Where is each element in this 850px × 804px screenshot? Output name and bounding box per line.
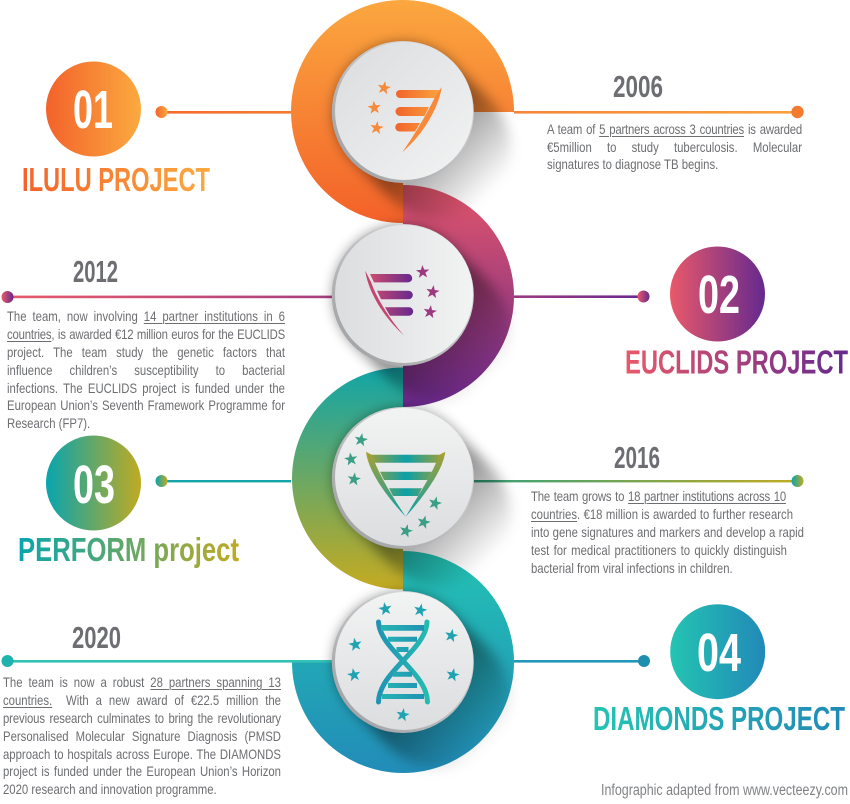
ring 4: turquoise to blue segment [292,551,514,773]
text block: 2012 description [7,308,285,431]
disk shadow 1 [403,112,441,150]
text block: 2012 description: European Union’s Seventh Framework Programme for [7,397,285,413]
connector line: EUCLIDS right [514,290,650,302]
number badge 01 [46,62,141,156]
disk 2 with icon [332,224,474,366]
text block: 2020 description: project is funded under the European Union’s Horizon [3,763,281,779]
text block: 2006 description: signatures to diagnose TB begins. [547,156,718,172]
title: ILULU PROJECT: ILULU PROJECT [22,161,210,198]
disk 1 with icon [332,41,474,183]
text block: 2016 description: test for medical practitioners to quickly distinguish [531,542,787,558]
connector line: 2016 right [474,475,804,487]
connector line: PERFORM left [156,475,291,487]
ring 3: teal to gold segment [292,368,403,590]
number badge 04: 04 [697,623,741,683]
disk 3 with icon [332,407,474,549]
text block: 2006 description: €5million to study tuberculosis. Molecular [547,139,802,155]
icon: DNA helix with seven stars [346,601,461,722]
text block: 2012 description: project. The team study the genetic factors that [7,344,285,360]
text block: 2006 description [547,121,802,172]
connector line: 2006 right [514,106,804,118]
connector line: 2012 left [2,291,332,303]
ring 2: pink to purple segment [403,185,514,407]
text block: 2016 description: bacterial from viral infections in children. [531,560,733,576]
text block: 2020 description: 2020 research and innovation programme. [3,781,217,797]
icon: EUCLIDS shield with three stars [365,265,440,336]
disk 4 with icon [332,591,474,733]
text block: 2016 description: countries. €18 million is awarded to further research [531,506,793,522]
text block: 2020 description: Personalised Molecular Signature Diagnosis (PMSD [3,728,281,744]
year 2012: 2012 [73,254,118,289]
text block: 2012 description: Research (FP7). [7,415,90,431]
icon: ILULU shield with three stars [367,80,442,152]
text block: 2016 description: into gene signatures and markers and develop a rapid [531,524,804,540]
disk shadow 3 [403,478,441,516]
ring 1: orange segment [291,0,514,223]
number badge 04 [670,604,765,699]
number badge 03: 03 [73,455,115,515]
disk shadow 2 [403,295,439,331]
number badge 01: 01 [73,80,113,140]
connector line: ILULU left [156,106,291,118]
text block: 2020 description [3,674,281,797]
connector line: 2020 left [2,655,332,667]
text block: 2020 description: approach to hospitals across Europe. The DIAMONDS [3,746,281,762]
year 2006: 2006 [613,69,663,104]
text block: 2012 description: The team, now involving 14 partner institutions in 6 [7,308,285,324]
text block: 2020 description: previous research culminates to bring the revolutionary [3,710,281,726]
text block: 2012 description: infections. The EUCLIDS project is funded under the [7,380,285,396]
year 2020: 2020 [72,620,121,655]
text block: 2016 description [531,488,804,576]
text block: 2020 description: The team is now a robust 28 partners spanning 13 [3,674,281,690]
text block: 2012 description: influence children’s susceptibility to bacterial [7,362,285,378]
connector line: DIAMONDS right [514,655,650,667]
number badge 02: 02 [698,265,740,325]
text block: 2006 description: A team of 5 partners across 3 countries is awarded [547,121,802,137]
text block: 2016 description: The team grows to 18 partner institutions across 10 [531,488,786,504]
text block: 2012 description: countries, is awarded €12 million euros for the EUCLIDS [7,326,285,342]
icon: PERFORM triangle with six stars [343,432,445,538]
number badge 03 [46,436,141,530]
number badge 02 [670,246,765,342]
title: PERFORM project: PERFORM project [18,531,239,568]
disk shadow 4 [403,662,439,698]
text block: 2020 description: countries. With a new award of €22.5 million the [3,692,281,708]
year 2016: 2016 [614,440,660,475]
